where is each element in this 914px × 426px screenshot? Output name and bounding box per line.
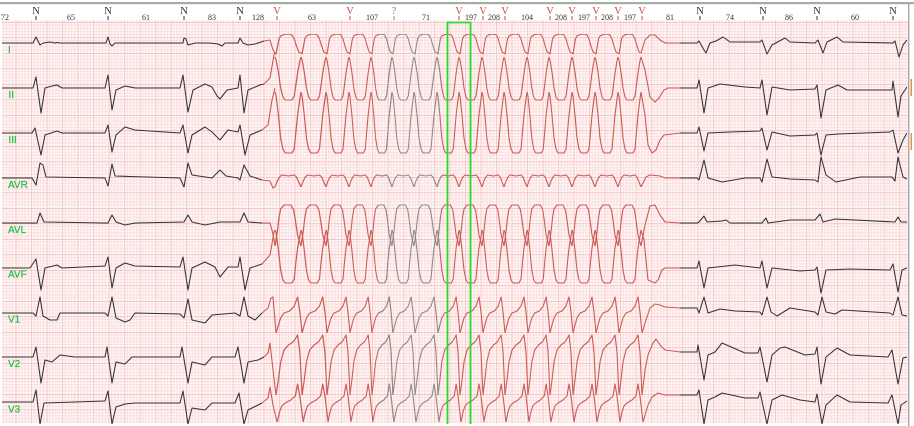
normal beat markers: N [813, 6, 821, 17]
normal beat markers: N [696, 6, 704, 17]
lead labels: I [8, 45, 11, 56]
beat-to-beat interval numbers: 60 [851, 13, 859, 22]
ventricular beat markers: V [455, 6, 463, 17]
beat-to-beat interval numbers: 83 [208, 13, 216, 22]
normal beat markers: N [889, 6, 897, 17]
lead I trace [2, 34, 907, 57]
beat-to-beat interval numbers: 72 [1, 13, 9, 22]
normal beat markers: N [759, 6, 767, 17]
lead labels: AVL [8, 225, 27, 236]
ventricular beat markers: V [546, 6, 554, 17]
lead aVF trace [2, 230, 907, 293]
normal beat markers: N [104, 6, 112, 17]
beat-to-beat interval numbers: 71 [422, 13, 430, 22]
beat-to-beat interval numbers: 86 [785, 13, 793, 22]
normal beat markers: N [32, 6, 40, 17]
ventricular beat markers: V [273, 6, 281, 17]
lead II trace [2, 52, 907, 118]
beat-to-beat interval numbers: 74 [726, 13, 734, 22]
lead V1 trace [2, 297, 907, 333]
lead labels: II [8, 90, 14, 101]
ventricular beat markers: V [592, 6, 600, 17]
ventricular beat markers: V [614, 6, 622, 17]
beat-to-beat interval numbers: 208 [555, 13, 567, 22]
beat-to-beat interval numbers: 128 [252, 13, 264, 22]
normal beat markers [32, 6, 897, 20]
beat-to-beat interval numbers: 81 [666, 13, 674, 22]
lead V2 trace [2, 335, 907, 395]
lead aVR trace [2, 157, 907, 188]
beat-to-beat interval numbers: 63 [308, 13, 316, 22]
ventricular beat markers: V [346, 6, 354, 17]
beat annotation header [1, 6, 897, 22]
beat-to-beat interval numbers: 104 [521, 13, 533, 22]
lead labels: V1 [8, 314, 21, 326]
ventricular beat markers: V [501, 6, 509, 17]
ventricular beat markers: V [479, 6, 487, 17]
beat-to-beat interval numbers: 65 [67, 13, 75, 22]
normal beat markers: N [180, 6, 188, 17]
beat-to-beat interval numbers: 197 [578, 13, 590, 22]
normal beat markers: N [236, 6, 244, 17]
window top border [0, 2, 914, 4]
lead V3 trace [2, 384, 907, 424]
lead labels: AVR [8, 180, 28, 191]
beat-to-beat interval numbers: 197 [624, 13, 636, 22]
beat-to-beat interval numbers [1, 13, 859, 22]
beat-to-beat interval numbers: 61 [142, 13, 150, 22]
ventricular beat markers: V [568, 6, 576, 17]
lead labels: III [8, 135, 17, 146]
ventricular beat markers [273, 6, 646, 20]
green measurement caliper [448, 22, 470, 424]
lead labels [8, 45, 28, 416]
lead labels: AVF [8, 270, 27, 280]
window right border [908, 2, 912, 426]
beat-to-beat interval numbers: 208 [488, 13, 500, 22]
lead labels: V3 [8, 404, 21, 416]
beat-to-beat interval numbers: 208 [601, 13, 613, 22]
beat-to-beat interval numbers: 197 [465, 13, 477, 22]
unknown beat marker: ? [392, 6, 397, 17]
lead aVL trace [2, 205, 907, 246]
beat-to-beat interval numbers: 107 [366, 13, 378, 22]
lead labels: V2 [8, 359, 21, 370]
ventricular beat markers: V [638, 6, 646, 17]
lead III trace [2, 88, 907, 155]
